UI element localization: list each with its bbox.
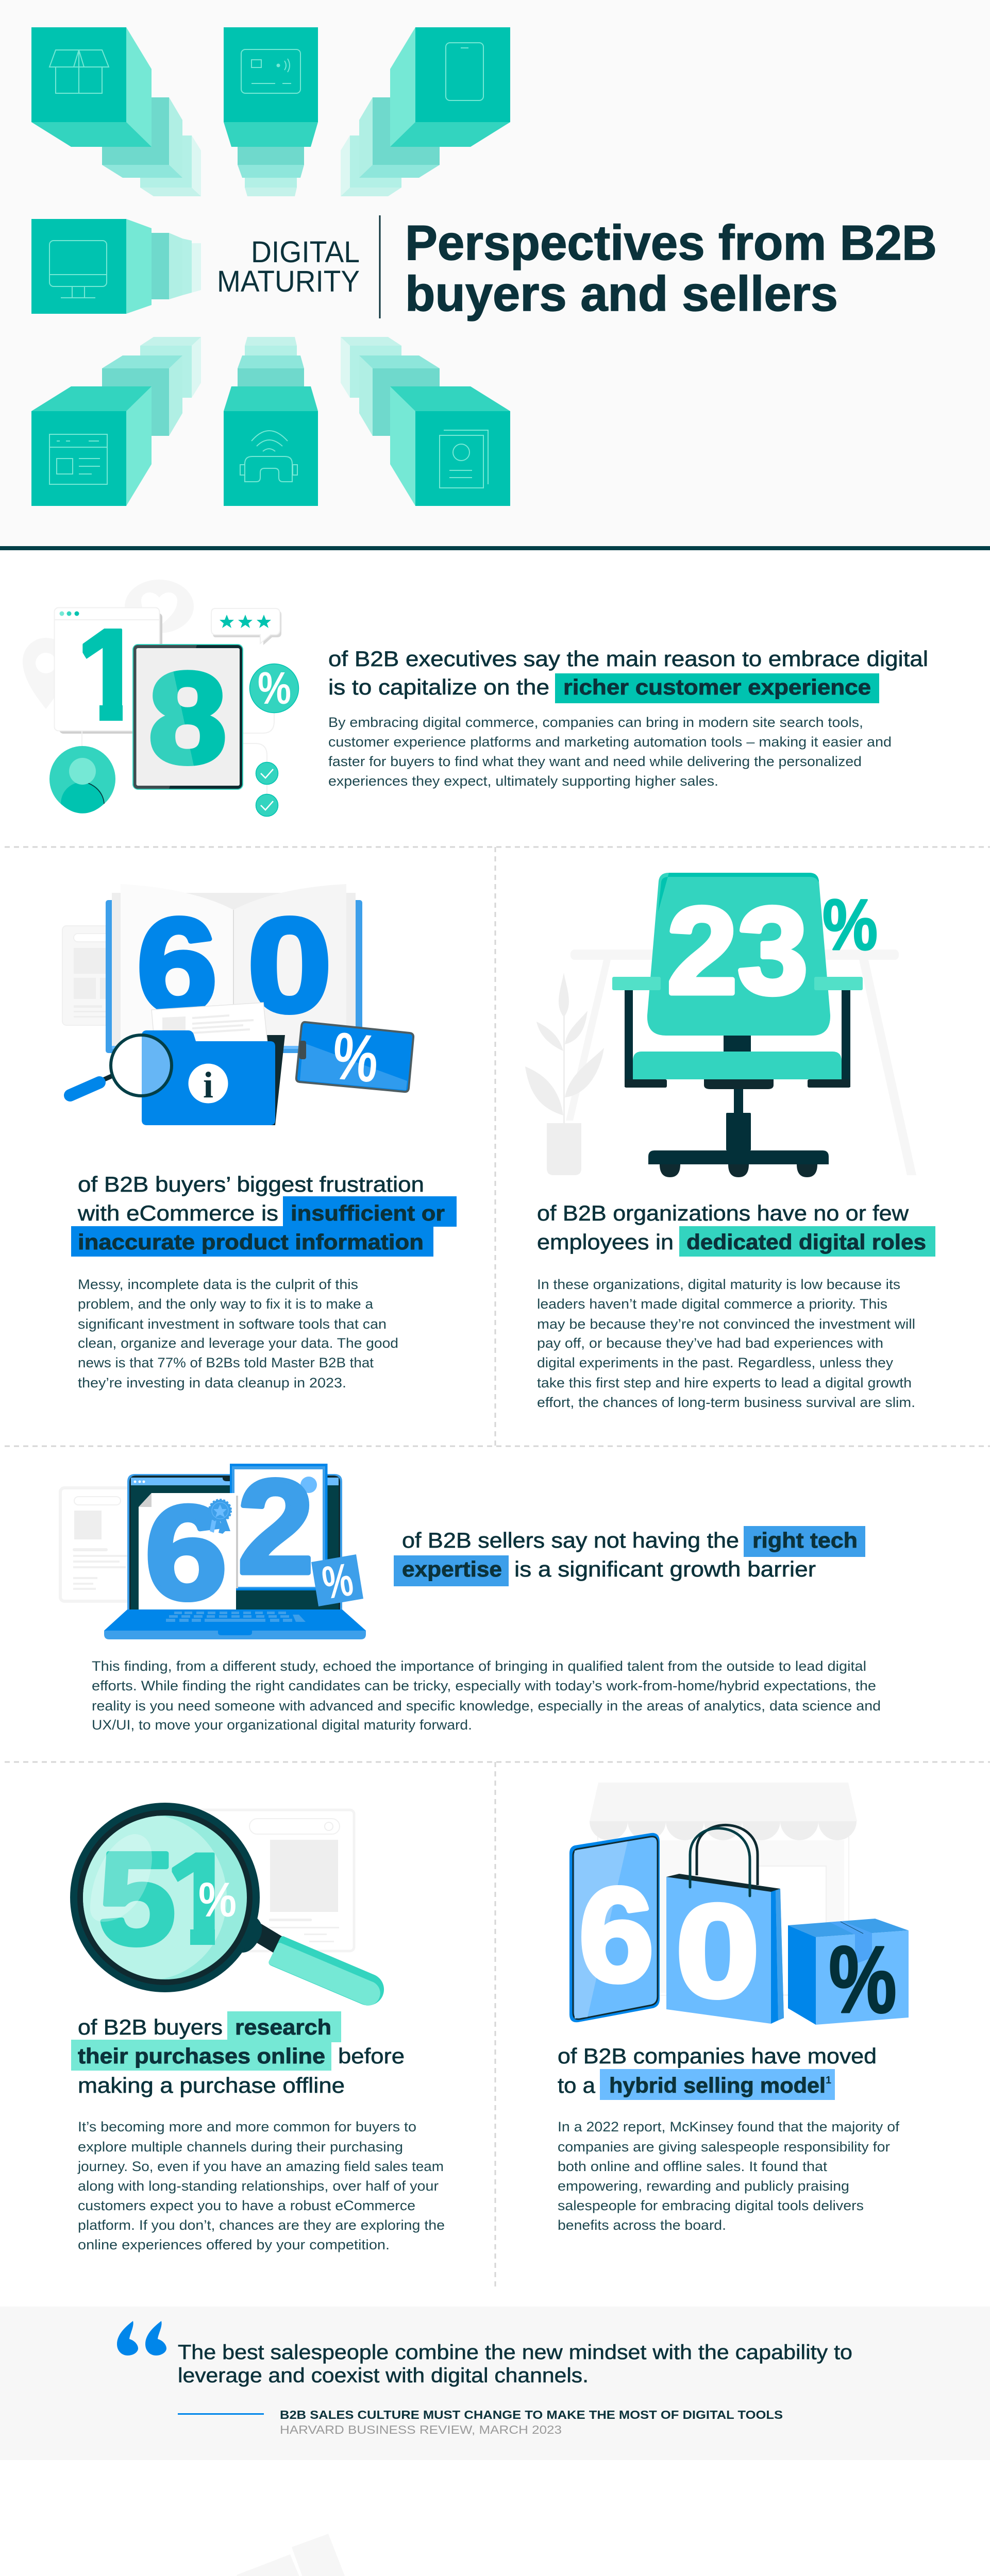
heading: tech expertise: of B2B sellers say not having the	[402, 1528, 739, 1552]
illustration: office chair with desk and plant	[525, 873, 916, 1177]
illustration: magnifying glass over web page: %	[198, 1873, 237, 1927]
heading: digital roles: employees in	[537, 1230, 674, 1254]
heading: online research: before	[338, 2044, 405, 2068]
text: quote source: HARVARD BUSINESS REVIEW, MARCH 2023	[280, 2423, 562, 2436]
text block: 18 percent body	[328, 715, 892, 789]
illustration: laptop with certificate and document: %	[319, 1554, 357, 1609]
illustration: top-right phone cube	[341, 27, 510, 196]
heading: online research: of B2B buyers	[78, 2015, 223, 2039]
illustration: laptop with certificate and document: 6	[145, 1478, 227, 1627]
text block: product information body: Messy, incomplete data is the culprit of this	[78, 1277, 358, 1292]
illustration: bottom-middle router cube	[224, 337, 318, 506]
panel: 60 percent product information	[62, 884, 457, 1391]
panel: 60 percent hybrid selling	[558, 1783, 909, 2233]
text block: tech expertise body: UX/UI, to move your organizational digital maturity forward.	[92, 1717, 472, 1733]
text block: tech expertise body: reality is you need someone with advanced and specific knowledge, especially in the areas of analytics, data science and	[92, 1698, 881, 1714]
text block: hybrid selling body: empowering, rewarding and publicly praising	[558, 2178, 849, 2194]
heading: product information: with eCommerce is	[77, 1201, 278, 1225]
illustration: magnifying glass over web page	[70, 1803, 389, 2010]
illustration: magnifying glass over web page: 5	[98, 1825, 176, 1972]
heading: 18 percent: richer customer experience	[563, 675, 871, 699]
heading: online research	[78, 2015, 405, 2097]
text block: hybrid selling body: benefits across the board.	[558, 2217, 726, 2233]
illustration: middle-left monitor cube	[31, 219, 201, 314]
panel: 51 percent online research	[70, 1803, 445, 2252]
text block: product information body: clean, organize and leverage your data. The good	[78, 1335, 398, 1351]
text: digital maturity label: MATURITY	[217, 265, 360, 298]
illustration: top-left box cube	[31, 27, 201, 196]
illustration: phone shopping bag and box	[569, 1783, 909, 2033]
text block: online research body: customers expect you to have a robust eCommerce	[78, 2198, 415, 2213]
text block: online research body: explore multiple channels during their purchasing	[78, 2139, 403, 2155]
illustration: book folder magnifier and phone: 6	[137, 891, 217, 1040]
text block: digital roles body: may be because they’re not convinced the investment will	[537, 1316, 915, 1332]
highlight: research	[227, 2011, 341, 2042]
heading: hybrid selling	[558, 2044, 877, 2097]
heading: product information	[77, 1172, 445, 1254]
text block: hybrid selling body: In a 2022 report, McKinsey found that the majority of	[558, 2119, 900, 2134]
text block: online research body: online experiences offered by your competition.	[78, 2237, 390, 2252]
panel: 62 percent tech expertise	[60, 1452, 881, 1733]
title: buyers and sellers	[405, 266, 838, 321]
panel: header	[0, 0, 990, 546]
text block: digital roles body	[537, 1277, 915, 1410]
text block: tech expertise body: efforts. While finding the right candidates can be tricky, especially with today’s work-from-home/hybrid expectations, the	[92, 1678, 876, 1693]
text block: product information body: they’re investing in data cleanup in 2023.	[78, 1375, 346, 1391]
illustration: top-middle card cube	[224, 27, 318, 196]
heading: digital roles	[537, 1201, 926, 1254]
heading: hybrid selling: to a	[558, 2073, 596, 2097]
highlight: inaccurate product information	[71, 1226, 433, 1257]
highlight: their purchases online	[71, 2040, 331, 2071]
text block: digital roles body: take this first step and hire experts to lead a digital growth	[537, 1375, 912, 1391]
panel: 18 percent statistic	[23, 580, 928, 816]
icon: quotation mark	[117, 2321, 166, 2355]
text: quote source: B2B SALES CULTURE MUST CHANGE TO MAKE THE MOST OF DIGITAL TOOLS	[280, 2408, 783, 2421]
text: quote	[178, 2341, 852, 2387]
heading: tech expertise: right tech	[752, 1528, 858, 1552]
highlight: hybrid selling model	[600, 2069, 835, 2100]
heading: 18 percent	[328, 647, 928, 699]
text block: digital roles body: leaders haven’t made digital commerce a priority. This	[537, 1296, 887, 1312]
illustration: phone shopping bag and box: %	[829, 1927, 897, 2033]
text block: 18 percent body: experiences they expect, ultimately supporting higher sales.	[328, 773, 718, 789]
illustration: bottom-left browser cube	[31, 337, 201, 506]
illustration: magnifying glass over web page: 1	[164, 1826, 238, 1973]
text block: online research body	[77, 2119, 445, 2252]
text block: tech expertise body: This finding, from a different study, echoed the importance of bringing in qualified talent from the outside to lead digital	[92, 1658, 866, 1674]
illustration: bottom-right document cube	[341, 337, 510, 506]
heading: online research: their purchases online	[78, 2044, 325, 2068]
illustration: phone shopping bag and box: 6	[579, 1860, 654, 2010]
text block: hybrid selling body: salespeople for embracing digital tools delivers	[558, 2198, 864, 2213]
text block: hybrid selling body: companies are giving salespeople responsibility for	[558, 2139, 890, 2155]
heading: 18 percent: of B2B executives say the main reason to embrace digital	[328, 647, 928, 671]
highlight: insufficient or	[283, 1196, 457, 1227]
title: Perspectives from B2B	[405, 215, 937, 270]
heading: hybrid selling: 1	[826, 2075, 831, 2086]
heading: product information: of B2B buyers’ biggest frustration	[78, 1172, 424, 1196]
heading: digital roles: of B2B organizations have no or few	[537, 1201, 909, 1225]
heading: 18 percent: is to capitalize on the	[328, 675, 549, 699]
text block: digital roles body: pay off, or because they’ve had bad experiences with	[537, 1335, 883, 1351]
illustration: window and tablet with 18 percent: %	[258, 663, 291, 714]
text block: digital roles body: digital experiments in the past. Regardless, unless they	[537, 1355, 894, 1370]
text block: online research body: platform. If you don’t, chances are they are exploring the	[78, 2217, 445, 2233]
heading: online research: research	[235, 2015, 331, 2039]
heading: digital roles: dedicated digital roles	[686, 1230, 926, 1254]
illustration: book folder magnifier and phone	[62, 884, 413, 1125]
illustration: phone shopping bag and box: 0	[676, 1877, 760, 2025]
text block: product information body: significant investment in software tools that can	[78, 1316, 387, 1332]
text block: digital roles body: In these organizations, digital maturity is low because its	[537, 1277, 900, 1292]
illustration: window and tablet with 18 percent: 1	[76, 602, 143, 749]
text block: product information body: problem, and the only way to fix it is to make a	[78, 1296, 374, 1312]
illustration: window and tablet with 18 percent: 8	[148, 646, 227, 790]
text block: hybrid selling body: both online and offline sales. It found that	[558, 2159, 828, 2174]
text block: tech expertise body	[92, 1658, 881, 1733]
heading: product information: insufficient or	[291, 1201, 445, 1225]
illustration: clipboard calendar and telescope	[54, 2534, 351, 2576]
text block: product information body	[78, 1277, 398, 1391]
panel: 60 percent new platform	[54, 2534, 914, 2576]
text block: hybrid selling body	[558, 2119, 900, 2233]
panel: quote	[0, 2307, 990, 2460]
panel: 23 percent dedicated digital roles	[525, 873, 935, 1410]
illustration: window and tablet with 18 percent	[23, 580, 299, 816]
text block: product information body: news is that 77% of B2Bs told Master B2B that	[78, 1355, 374, 1370]
illustration: book folder magnifier and phone: 0	[247, 891, 332, 1040]
text block: 18 percent body: faster for buyers to find what they want and need while delivering the personalized	[328, 754, 862, 769]
heading: tech expertise	[402, 1528, 858, 1581]
text: digital maturity label	[217, 235, 360, 298]
heading: hybrid selling: hybrid selling model	[609, 2073, 826, 2097]
illustration: office chair with desk and plant: 23	[667, 882, 808, 1020]
heading: tech expertise: is a significant growth barrier	[514, 1557, 816, 1581]
heading: product information: inaccurate product information	[78, 1230, 424, 1254]
text: quote source	[280, 2408, 783, 2436]
highlight: dedicated digital roles	[679, 1226, 935, 1257]
text: quote: The best salespeople combine the new mindset with the capability to	[178, 2341, 852, 2364]
highlight: right tech	[744, 1526, 865, 1557]
text: quote: leverage and coexist with digital channels.	[178, 2364, 589, 2387]
illustration: book folder magnifier and phone: i	[203, 1064, 213, 1106]
text block: 18 percent body: By embracing digital commerce, companies can bring in modern site search tools,	[328, 715, 863, 730]
heading: online research: making a purchase offline	[78, 2073, 345, 2097]
text block: online research body: It’s becoming more and more common for buyers to	[78, 2119, 416, 2134]
illustration: laptop with certificate and document	[60, 1452, 366, 1639]
text block: 18 percent body: customer experience platforms and marketing automation tools – making it easier and	[328, 734, 892, 750]
title	[405, 215, 937, 321]
text: digital maturity label: DIGITAL	[251, 235, 360, 269]
text block: digital roles body: effort, the chances of long-term business survival are slim.	[537, 1395, 915, 1410]
illustration: book folder magnifier and phone: %	[330, 1018, 381, 1097]
heading: hybrid selling: of B2B companies have moved	[558, 2044, 877, 2068]
text block: online research body: along with long-standing relationships, over half of your	[78, 2178, 439, 2194]
highlight: richer customer experience	[555, 673, 879, 703]
text block: online research body: journey. So, even if you have an amazing field sales team	[77, 2159, 444, 2174]
highlight: expertise	[394, 1555, 509, 1586]
illustration: laptop with certificate and document: 2	[238, 1452, 314, 1602]
illustration: office chair with desk and plant: %	[823, 884, 878, 965]
heading: tech expertise: expertise	[402, 1557, 502, 1581]
